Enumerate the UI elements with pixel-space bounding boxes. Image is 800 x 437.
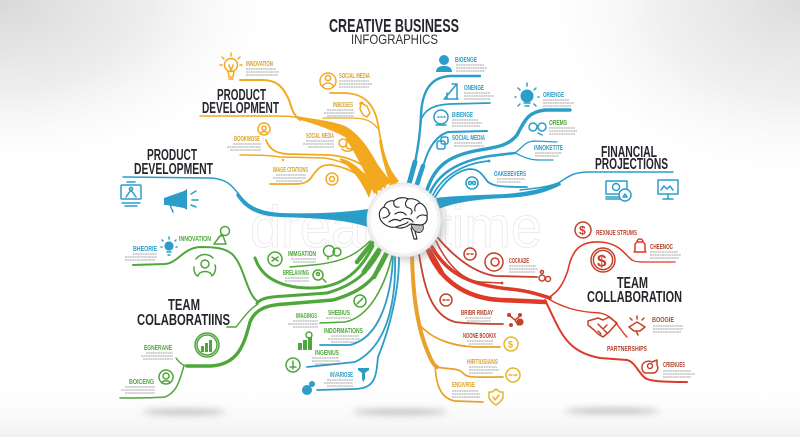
heading: team collaboration: TEAM <box>617 275 648 292</box>
icon: presentation board <box>121 182 141 206</box>
yellow fan strand right <box>379 140 399 186</box>
icon: handshake <box>588 317 617 337</box>
label: social media: SOCIAL MEDIA <box>452 133 485 142</box>
label: bheorie <box>125 244 157 260</box>
heading: team colaboratiins: COLABORATIINS <box>137 312 230 329</box>
label: social media <box>452 133 485 146</box>
label: noone bookix: NOONE BOOKIX <box>463 331 496 340</box>
icon: ring with gear <box>485 253 503 271</box>
icon: bars and circle <box>298 332 312 350</box>
icon: small search <box>313 270 326 282</box>
icon: chart circle <box>195 333 219 357</box>
label: brelaiving <box>283 268 309 281</box>
branch group: blue upper right <box>409 55 678 209</box>
title: CREATIVE BUSINESS <box>329 16 459 36</box>
label: orienge: ORIENGE <box>543 90 564 99</box>
icon: gears <box>529 123 546 135</box>
label: bribr rmday <box>461 308 493 321</box>
label: immgation <box>288 249 316 262</box>
label: engivrse <box>452 380 480 397</box>
icon: brain <box>379 198 427 239</box>
label: innovation: INNOVATION <box>179 234 211 243</box>
label: bibenge <box>452 110 482 126</box>
label: shebius: SHEBIUS <box>328 308 350 317</box>
heading: team colaboratiins <box>137 297 230 329</box>
heading: product development: PRODUCT <box>217 87 266 104</box>
icon: money and network <box>606 181 631 201</box>
branch group: team collaboration green <box>120 226 399 398</box>
label: invariose <box>324 370 353 386</box>
icon: person circle <box>320 73 336 89</box>
label: bheorie: BHEORIE <box>133 244 157 253</box>
icon: speech bubbles <box>324 246 341 259</box>
label: ingenius: INGENIUS <box>315 348 339 357</box>
label: social media: SOCIAL MEDIA <box>339 71 370 80</box>
hub: central brain circle <box>367 183 445 261</box>
label: inboses <box>324 100 354 116</box>
branch group: left product development blue <box>121 147 368 227</box>
label: invariose: INVARIOSE <box>330 370 353 379</box>
yellow fan strand left <box>340 158 373 198</box>
label: innoketite <box>534 143 563 156</box>
dark red branches <box>419 238 537 324</box>
label: imagings <box>288 311 318 327</box>
label: boiceng <box>121 377 155 393</box>
heading: product development <box>202 87 279 117</box>
heading: product development left: PRODUCT <box>147 147 197 164</box>
label: ingenius <box>312 348 340 364</box>
icon: light bulb <box>220 53 242 79</box>
label: immgation: IMMGATION <box>288 249 316 258</box>
branch group: team collaboration red <box>419 222 695 382</box>
left blue trunk <box>123 177 240 196</box>
label: noone bookix <box>463 331 496 344</box>
label: cheenoc <box>650 242 681 258</box>
icon: growth arrow <box>444 84 458 99</box>
heading: financial projections <box>595 144 668 173</box>
icon: dollar circle top: $ <box>579 224 586 238</box>
label: shebius <box>326 308 351 318</box>
label: oakebevers: OAKEBEVERS <box>494 169 526 178</box>
icon: coins <box>339 139 354 151</box>
label: onenge: ONENGE <box>464 83 484 92</box>
red branches <box>428 242 687 382</box>
heading: team collaboration <box>587 275 682 306</box>
label: brelaiving: BRELAIVING <box>283 268 309 277</box>
icon: circle nodes <box>268 252 282 266</box>
left blue tapered trunk <box>236 192 368 227</box>
label: inboses: INBOSES <box>333 100 353 109</box>
label: innovation: INNOVATION <box>246 59 273 68</box>
title <box>329 16 459 47</box>
icon: filled bulb <box>515 83 539 106</box>
label: bibenge: BIBENGE <box>452 110 473 119</box>
icon: nodes <box>507 313 524 327</box>
label: hirtiusians <box>467 357 499 373</box>
label: imagings: IMAGINGS <box>296 311 317 320</box>
icon: person circle small <box>159 370 173 384</box>
label: partnerships: PARTNERSHIPS <box>607 344 647 353</box>
label: innovation <box>246 59 279 75</box>
label: egnerane <box>141 343 173 359</box>
floor shadows <box>142 409 660 414</box>
icon: dollar coin <box>504 337 518 351</box>
heading: team collaboration: COLLABORATION <box>587 289 682 306</box>
label: orienge <box>543 90 574 106</box>
icon: gears <box>539 270 550 282</box>
label: bribr rmday: BRIBR RMDAY <box>461 308 493 317</box>
label: indormations <box>324 326 363 342</box>
icon: linked squares <box>437 137 448 149</box>
icon: large dollar circle: $ <box>597 252 607 270</box>
title: INFOGRAPHICS <box>351 31 438 47</box>
heading: product development left <box>134 147 213 178</box>
blue right tapered trunk <box>436 182 561 209</box>
label: orems: OREMS <box>549 118 567 127</box>
blue branches <box>409 76 673 197</box>
label: social media 2 <box>303 131 334 147</box>
label: boogie <box>652 315 683 332</box>
heading: team colaboratiins: TEAM <box>168 297 200 314</box>
green branches <box>120 241 392 398</box>
label: image citations <box>273 165 308 181</box>
icon: coin circle <box>286 358 300 372</box>
icon: lamp <box>629 316 645 335</box>
label: crienues <box>663 360 695 377</box>
label: bioenge <box>455 55 487 71</box>
label: engivrse: ENGIVRSE <box>452 380 475 389</box>
icon: small ring <box>464 248 476 260</box>
watermark: dreamstime <box>250 195 542 260</box>
label: cheenoc: CHEENOC <box>650 242 673 251</box>
label: image citations: IMAGE CITATIONS <box>273 165 308 174</box>
orange branches <box>412 256 503 402</box>
label: boogie: BOOGIE <box>652 315 674 324</box>
label: onenge <box>464 83 494 99</box>
icon: dollar coin: $ <box>508 340 513 350</box>
label: cockade <box>509 256 538 272</box>
heading: product development: DEVELOPMENT <box>202 100 279 117</box>
teal branches <box>307 256 399 390</box>
icon: worker <box>436 55 452 72</box>
branch group: orange <box>412 256 520 405</box>
icon: large dollar circle <box>591 248 615 272</box>
icon: blue bulb <box>161 237 177 255</box>
icon: blue tool <box>358 368 369 382</box>
label: boiceng: BOICENG <box>129 377 154 386</box>
label: social media 2: SOCIAL MEDIA <box>306 131 334 140</box>
icon: cloud gear <box>642 360 658 373</box>
icon: small circle <box>258 123 270 135</box>
yellow branches <box>200 80 397 195</box>
icon: small target <box>326 173 338 185</box>
branch group: product development yellow <box>200 53 399 198</box>
icon: figure on stand <box>214 226 230 244</box>
icon: monitor chart <box>658 180 678 199</box>
label: crienues: CRIENUES <box>663 360 685 369</box>
icon: hand <box>360 102 370 117</box>
icon: orange ring <box>506 368 520 382</box>
heading: product development left: DEVELOPMENT <box>134 161 213 178</box>
label: egnerane: EGNERANE <box>144 343 172 352</box>
icon: small ring left <box>440 294 452 306</box>
label: social media <box>339 71 372 87</box>
yellow main trunk <box>297 116 391 194</box>
icon: speech circle <box>434 110 448 125</box>
label: bioenge: BIOENGE <box>455 55 477 64</box>
label: innoketite: INNOKETITE <box>534 143 563 152</box>
icon: small circle <box>466 177 478 189</box>
label: bookings <box>227 134 261 150</box>
label: cockade: COCKADE <box>509 256 529 265</box>
heading: financial projections: PROJECTIONS <box>595 156 668 173</box>
icon: shield check <box>489 389 503 405</box>
icon: bag <box>634 239 646 252</box>
label: orems <box>549 118 577 134</box>
icon: dollar circle top <box>575 222 591 238</box>
icon: person circle <box>194 254 215 276</box>
icon: pencil circle <box>354 295 366 307</box>
label: bookings: BOOKWOSE <box>234 134 260 143</box>
label: indormations: INDORMATIONS <box>324 326 363 335</box>
label: oakebevers <box>494 169 526 182</box>
heading: financial projections: FINANCIAL <box>601 144 657 161</box>
icon: blue circles <box>302 381 315 395</box>
label: hirtiusians: HIRTIUSIANS <box>467 357 498 366</box>
icon: megaphone <box>164 189 198 212</box>
label: rexnue strums: REXNUE STRUMS <box>596 228 637 237</box>
